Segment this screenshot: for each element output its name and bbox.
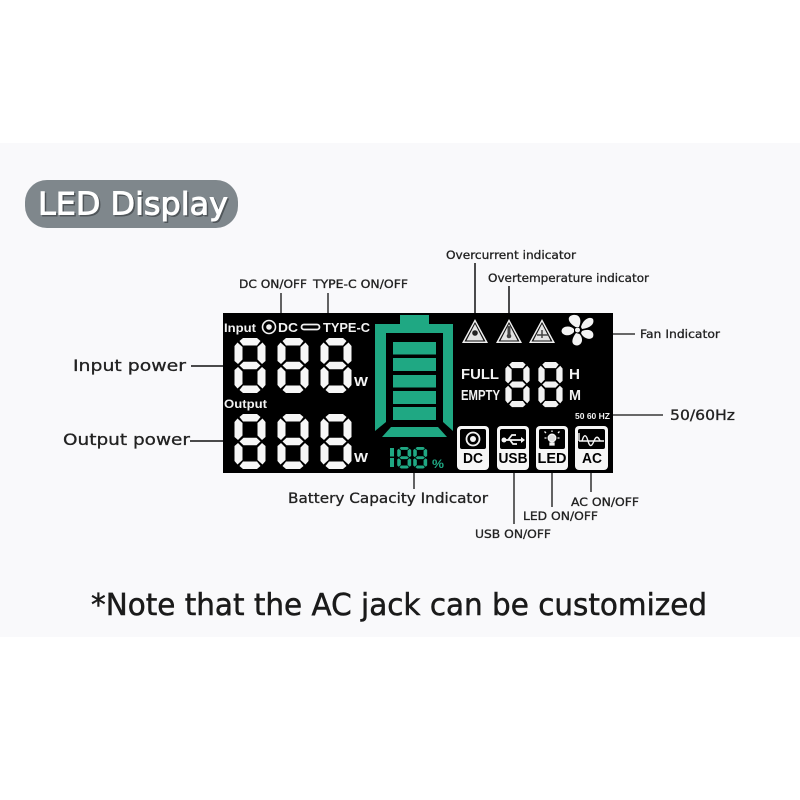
- callout: Fan Indicator: [613, 327, 720, 341]
- callout: TYPE-C ON/OFF: [312, 277, 408, 313]
- input digits: [234, 338, 369, 393]
- button: AC: [575, 426, 608, 470]
- callout: TYPE-C ON/OFF: TYPE-C ON/OFF: [312, 277, 408, 291]
- icon: overcurrent triangle: [462, 319, 488, 343]
- callout: Battery Capacity Indicator: Battery Capacity Indicator: [288, 491, 488, 507]
- button: AC: AC: [582, 451, 602, 467]
- input header: [224, 320, 371, 335]
- battery percentage: %: [432, 457, 444, 471]
- note text: *Note that the AC jack can be customized: [91, 588, 707, 623]
- input header: DC: [278, 320, 299, 335]
- callout: USB ON/OFF: [475, 473, 551, 541]
- battery percentage: [390, 447, 444, 471]
- callout: Overtemperature indicator: Overtemperature indicator: [488, 271, 649, 285]
- heading pill: LED Display: [25, 180, 238, 228]
- callout: 50/60Hz: [613, 408, 735, 424]
- time readout: H: [569, 366, 580, 383]
- callout: DC ON/OFF: DC ON/OFF: [239, 277, 307, 291]
- button: DC: [457, 426, 489, 470]
- time readout: FULL: [461, 366, 499, 383]
- callout: Overcurrent indicator: Overcurrent indicator: [446, 248, 576, 262]
- time readout: 50 60 HZ: [575, 411, 610, 421]
- battery gauge: [375, 315, 453, 437]
- callout: Input power: Input power: [73, 356, 186, 375]
- callout: Output power: Output power: [63, 430, 190, 449]
- callout: AC ON/OFF: AC ON/OFF: [571, 495, 639, 509]
- output digits: W: [354, 450, 369, 465]
- input digits: W: [354, 374, 369, 389]
- callout: Fan Indicator: Fan Indicator: [640, 327, 720, 341]
- icon: overtemperature triangle: [496, 319, 522, 343]
- LCD panel: [223, 313, 613, 473]
- input header: Input: [224, 321, 256, 335]
- callout: USB ON/OFF: USB ON/OFF: [475, 527, 551, 541]
- heading pill: LED Display: LED Display: [38, 186, 228, 222]
- callout: Overcurrent indicator: [446, 248, 576, 313]
- button: LED: [536, 426, 568, 470]
- heading pill: LED Display: LED Display: [40, 188, 230, 224]
- time readout: [461, 362, 610, 421]
- input header: TYPE-C: [323, 320, 371, 335]
- callout: LED ON/OFF: LED ON/OFF: [523, 509, 598, 523]
- callout: LED ON/OFF: [523, 473, 598, 523]
- background band: [0, 143, 800, 637]
- icon: fan: [562, 315, 593, 346]
- callout: DC ON/OFF: [239, 277, 307, 313]
- button: USB: [497, 426, 529, 470]
- output label: Output: [224, 397, 267, 411]
- button: DC: DC: [463, 451, 483, 467]
- time readout: EMPTY: [461, 387, 500, 404]
- button: USB: USB: [498, 451, 528, 467]
- callout: 50/60Hz: 50/60Hz: [670, 408, 735, 424]
- callout: AC ON/OFF: [571, 473, 639, 509]
- time readout: M: [569, 387, 581, 404]
- icon: warning triangle: [529, 319, 555, 343]
- output digits: [234, 414, 369, 469]
- button: LED: LED: [538, 451, 566, 467]
